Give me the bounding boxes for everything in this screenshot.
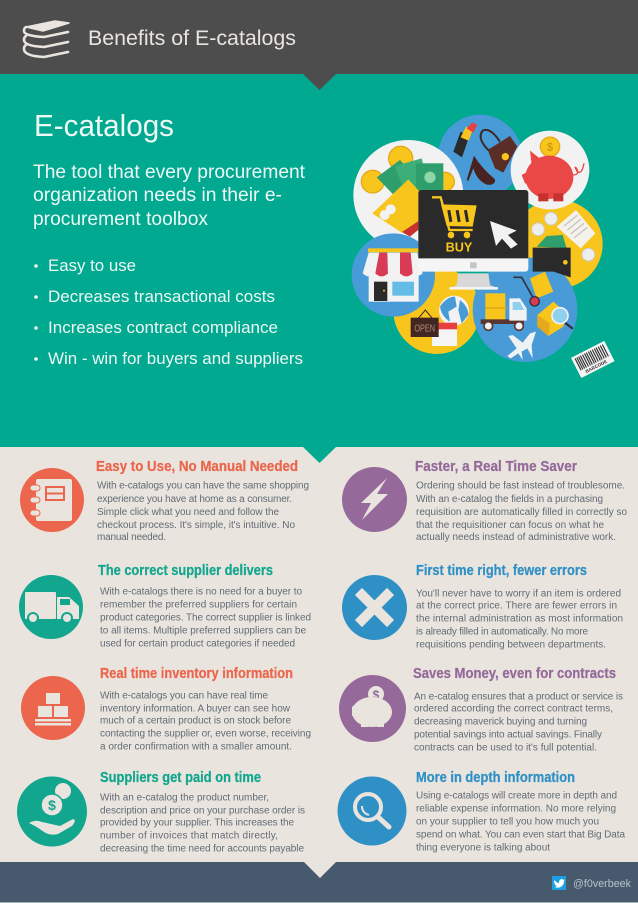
panel: footer bar — [0, 862, 638, 903]
icon: notebook — [20, 468, 84, 532]
body text: ordered according the correct contract terms, — [414, 704, 613, 715]
body text: decreasing maverick buying and turning — [414, 716, 587, 727]
feature: easy to use — [20, 458, 309, 543]
body text — [100, 793, 305, 854]
icon: lightning bolt — [342, 467, 407, 532]
icon: receipt — [557, 210, 595, 248]
icon: delivery truck — [481, 293, 527, 330]
icon: shop — [363, 248, 423, 302]
body text: remember the preferred suppliers for certain — [100, 600, 297, 611]
body text: product categories. The correct supplier is linked — [100, 613, 311, 624]
icon: twitter badge — [552, 876, 566, 890]
icon: open sign: OPEN — [414, 324, 435, 335]
heading: Easy to Use, No Manual Needed — [96, 458, 298, 475]
text block: bullet list: Decreases transactional costs — [48, 287, 275, 306]
body text: on your supplier to tell you how much you — [416, 816, 599, 827]
icon: high heel — [467, 156, 495, 185]
icon: truck — [19, 575, 83, 639]
body text — [100, 587, 311, 649]
icon: box with magnifier — [537, 302, 573, 336]
body text: to all items. Multiple preferred suppliers can be — [100, 626, 306, 637]
icon: barcode — [571, 341, 615, 378]
body text: much of a certain product is on stock before — [100, 716, 291, 727]
feature: faster — [342, 458, 627, 543]
icon: monitor — [418, 190, 528, 290]
heading: More in depth information — [416, 769, 575, 786]
heading: Suppliers get paid on time — [100, 769, 261, 786]
icon: shopping cart — [432, 197, 477, 238]
body text: With e-catalogs you can have real time — [100, 691, 268, 702]
text block: bullet list: Win - win for buyers and suppliers — [48, 349, 303, 368]
body text: manual needed. — [97, 532, 166, 543]
body text: decreasing the time need for accounts payable — [100, 843, 304, 854]
body text: description and price on your purchase order is — [100, 805, 305, 816]
heading: Real time inventory information — [100, 665, 293, 682]
text block: bullet list: Increases contract compliance — [48, 318, 278, 337]
title: header: Benefits of E-catalogs — [88, 27, 296, 50]
text block: subtitle — [33, 161, 306, 230]
icon: cursor arrow — [490, 221, 518, 249]
icon: piggy bank — [522, 137, 584, 201]
icon: stack of books — [24, 21, 69, 57]
body text: at the correct price. There are fewer errors in — [416, 601, 617, 612]
body text: With e-catalogs you can have the same shopping — [97, 480, 309, 492]
title: E-catalogs: E-catalogs — [34, 108, 174, 143]
icon: hand trolley — [513, 272, 553, 306]
icon: magnifier — [338, 776, 406, 846]
body text: contracts can be used to it's full potential. — [414, 742, 597, 753]
feature: inventory — [21, 665, 311, 752]
feature: saves money — [339, 665, 623, 753]
body text: requisitions pending between departments. — [416, 639, 606, 650]
icon: silver coins — [532, 212, 595, 261]
text block: subtitle: procurement toolbox — [33, 208, 208, 230]
illustration: e-commerce cluster — [352, 115, 615, 378]
heading: Faster, a Real Time Saver — [415, 458, 577, 475]
icon: boxes on pallet — [21, 676, 85, 740]
body text: used for certain product categories if needed — [100, 638, 295, 649]
icon: monitor: BUY — [446, 241, 473, 255]
body text — [97, 480, 309, 543]
text block: subtitle: organization needs in their e- — [33, 184, 282, 206]
body text: thing everyone is talking about — [416, 842, 550, 853]
body text: spend on what. You can even start that Big Data — [416, 829, 625, 840]
body text: Simple click what you need and follow the — [97, 507, 279, 518]
body text: reliable expense information. No more relying — [416, 804, 616, 815]
feature: correct supplier — [19, 562, 311, 649]
body text: requisition are automatically filled in correctly so — [416, 507, 627, 518]
body text: contacting the supplier or, even worse, receiving — [100, 729, 311, 740]
icon: coins — [361, 146, 454, 193]
body text — [416, 589, 623, 650]
heading: First time right, fewer errors — [416, 562, 587, 579]
body text: is already filled in automatically. No more — [416, 626, 588, 637]
icon: wallet — [533, 235, 571, 277]
icon: cross — [342, 575, 407, 640]
body text: provided by your supplier. This increases the — [100, 817, 294, 828]
body text: Ordering should be fast instead of troublesome. — [416, 480, 625, 492]
icon: hand with coin: $ — [48, 797, 56, 813]
body text — [414, 692, 623, 753]
body text: You'll never have to worry if an item is ordered — [416, 589, 621, 600]
text block: bullet list — [34, 256, 303, 368]
body text: With e-catalogs there is no need for a buyer to — [100, 587, 302, 598]
icon: piggy bank — [339, 675, 406, 742]
icon: open sign — [411, 310, 439, 337]
feature: suppliers paid — [17, 769, 305, 854]
body text: number of invoices that match directly, — [100, 830, 278, 841]
icon: handbag — [481, 130, 517, 173]
icon: hand with coin — [17, 776, 87, 846]
panel: hero background — [0, 74, 638, 447]
icon: piggy bank: $ — [547, 142, 553, 154]
notch: hero pointer — [303, 447, 336, 463]
body text — [416, 480, 627, 543]
body text: potential savings into actual savings. Finally — [414, 729, 602, 740]
icon: globe — [439, 296, 469, 326]
panel: header bar — [0, 0, 638, 90]
body text — [416, 790, 625, 853]
body text: checkout process. It's simple, it's intuitive. No — [97, 520, 295, 531]
icon: calendar — [432, 323, 457, 346]
icon: piggy bank: $ — [373, 688, 380, 702]
feature: in depth information — [338, 769, 625, 853]
body text — [100, 691, 311, 752]
feature: first time right — [342, 562, 623, 650]
body text: actually needs instead of administrative work. — [416, 532, 616, 543]
icon: airplane — [507, 332, 536, 360]
body text: experience you have at home as a consumer. — [97, 494, 292, 505]
text block: bullet list: Easy to use — [48, 256, 136, 275]
body text: With an e-catalog the product number, — [100, 793, 269, 804]
body text: An e-catalog ensures that a product or service is — [414, 692, 623, 703]
icon: banknotes — [377, 158, 443, 195]
body text: a order confirmation with a smaller amount. — [100, 741, 292, 752]
icon: credit card — [372, 179, 437, 237]
icon: barcode: BARCODE — [585, 359, 608, 374]
icon: lipstick — [453, 123, 477, 157]
body text: inventory information. A buyer can see how — [100, 703, 291, 714]
heading: The correct supplier delivers — [98, 562, 273, 579]
body text: With an e-catalog the fields in a purchasing — [416, 494, 603, 505]
text: twitter handle: @f0verbeek — [573, 878, 631, 890]
body text: the internal administration as most information — [416, 614, 623, 625]
body text: Using e-catalogs will create more in depth and — [416, 790, 617, 801]
body text: that the requisitioner can focus on what he — [416, 520, 604, 531]
text block: subtitle: The tool that every procurement — [33, 161, 306, 183]
